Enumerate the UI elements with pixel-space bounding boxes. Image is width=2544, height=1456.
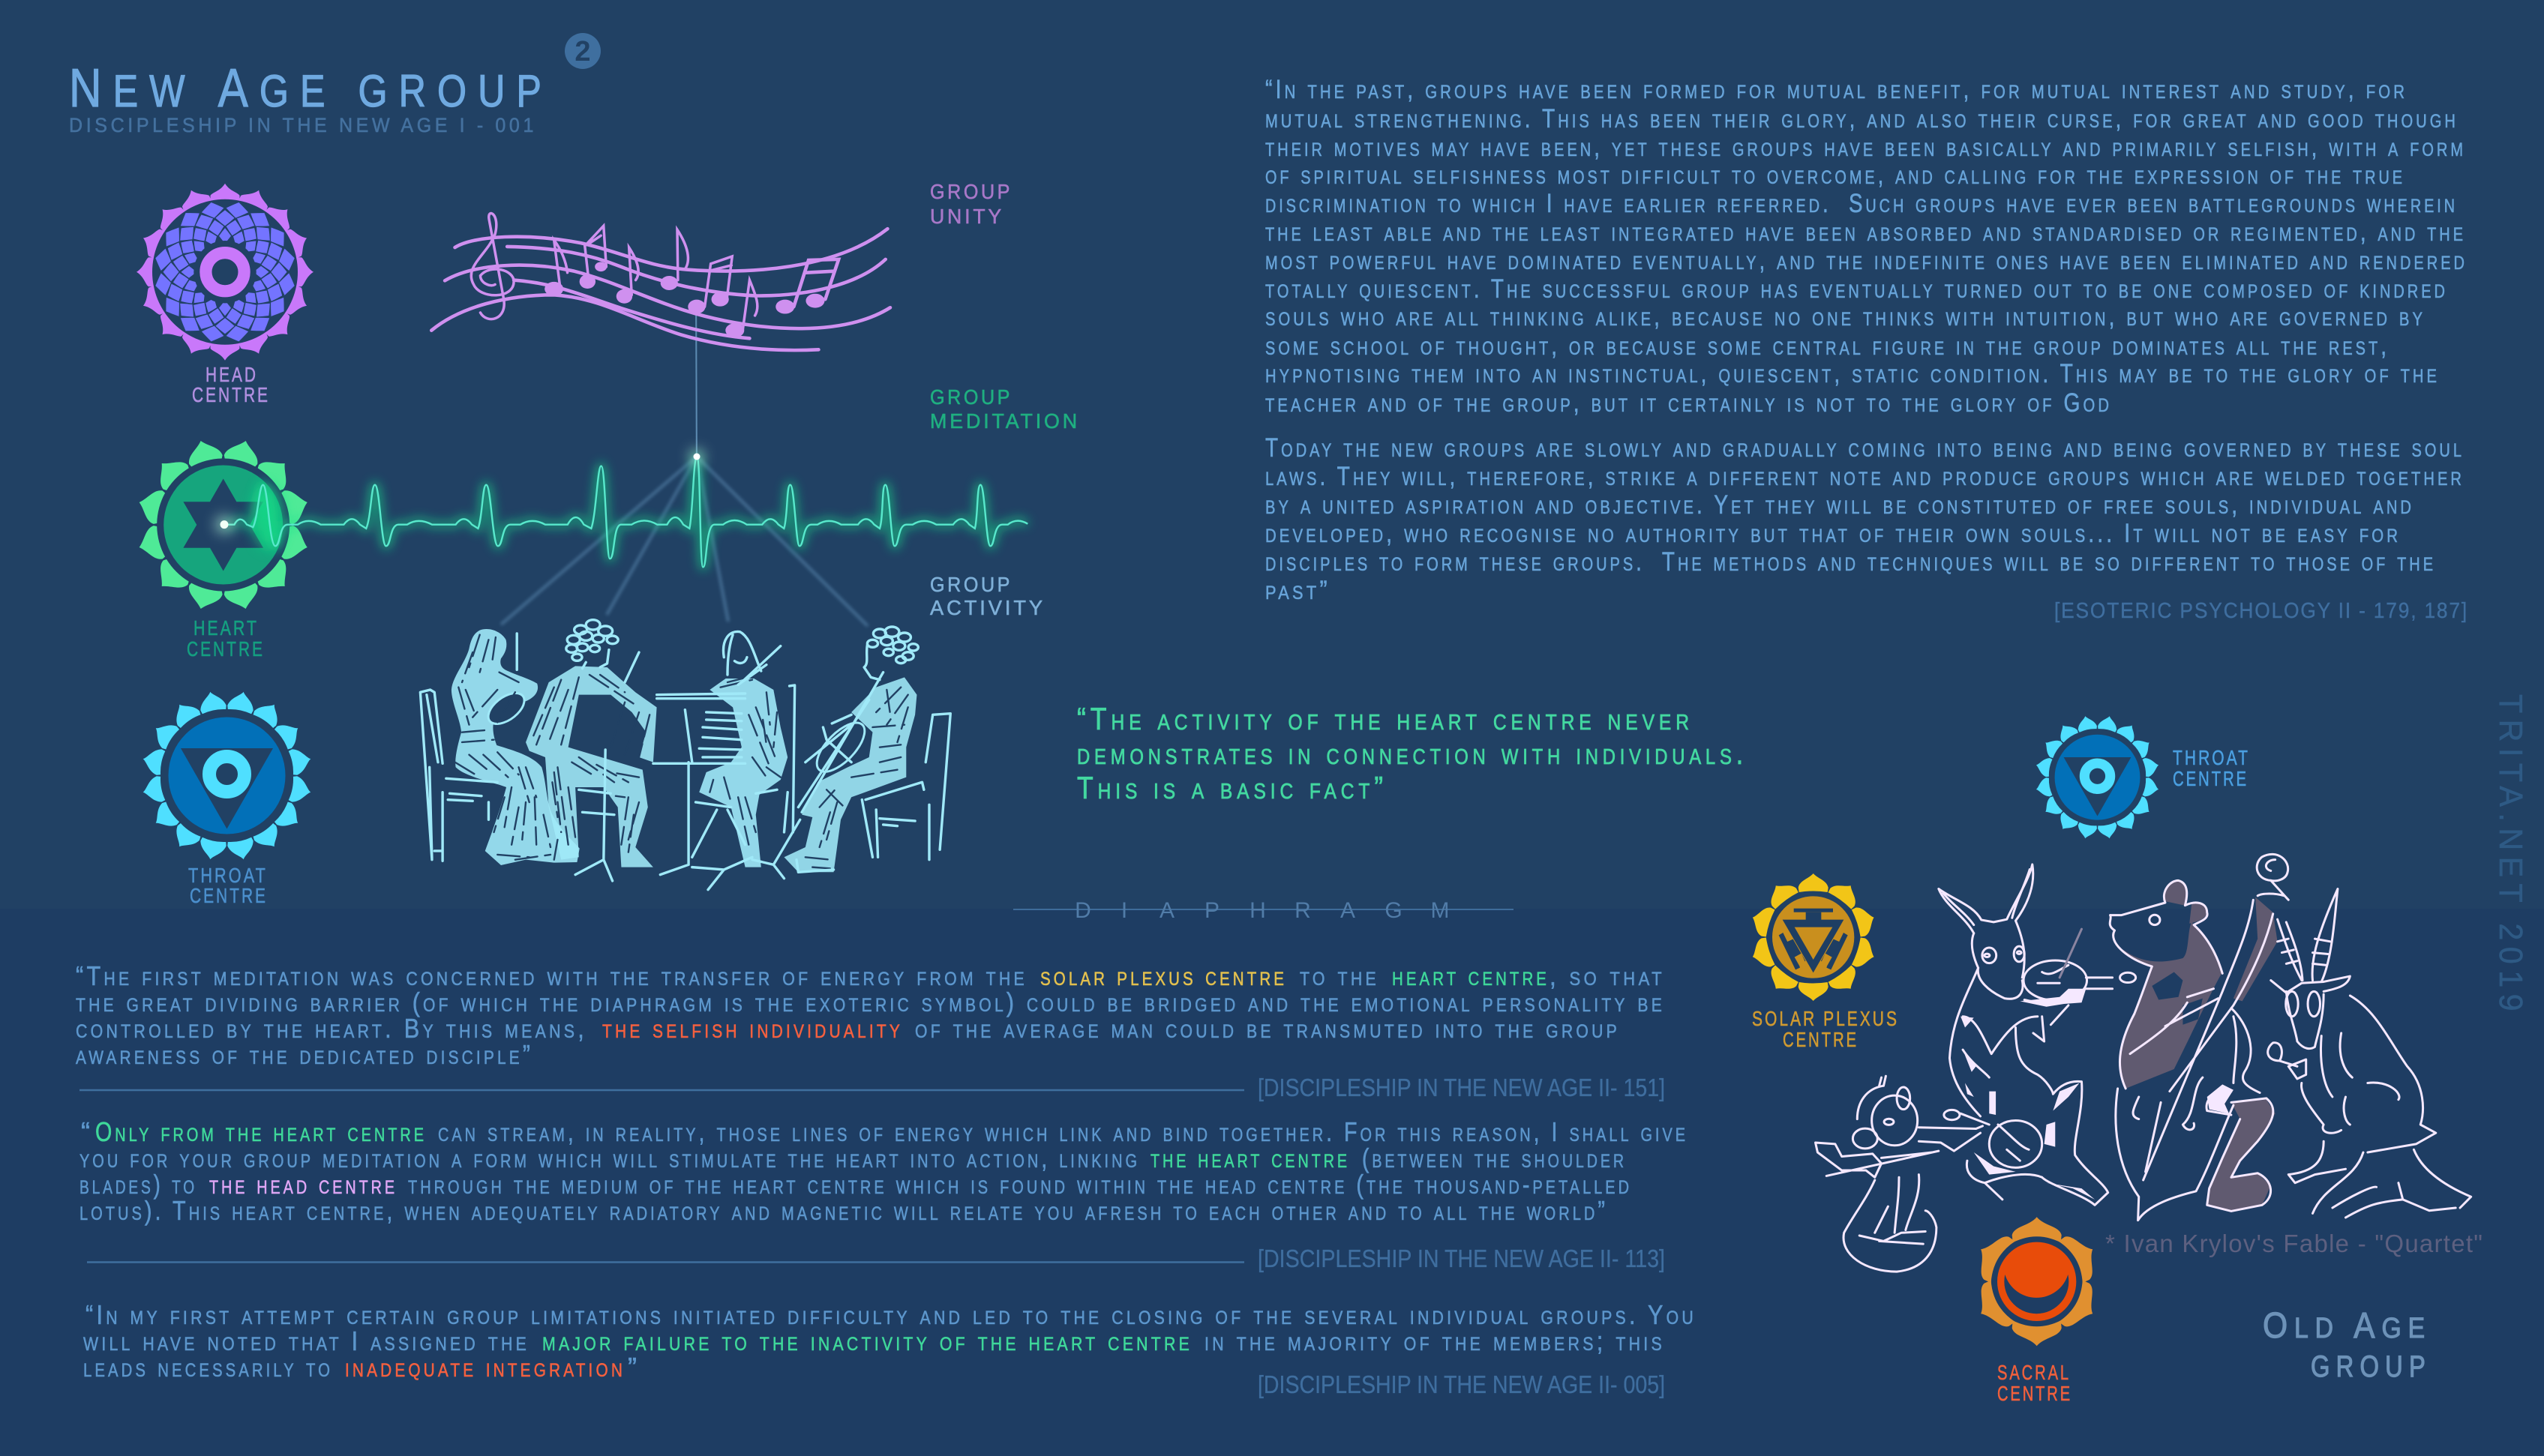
label: solar plexus centre: CENTRE: [1783, 1028, 1858, 1051]
label: throat centre small: [2173, 746, 2250, 790]
quote 1: “The first meditation was concerned with the transfer of energy from the: [76, 960, 1028, 991]
goat: [2278, 919, 2302, 981]
green heart centre quote: demonstrates in connection with individuals.: [1077, 735, 1748, 771]
quote 3: ”: [628, 1352, 640, 1383]
quote 1: awareness of the dedicated disciple”: [76, 1039, 533, 1070]
main quotation: right panel: [1265, 75, 2468, 623]
quote 1: controlled by the heart. By this means,: [76, 1013, 587, 1044]
label: group unity: UNITY: [930, 205, 1004, 228]
green heart centre quote: This is a basic fact”: [1077, 770, 1388, 805]
label: throat centre: THROAT: [188, 864, 268, 887]
hare: [1939, 864, 2033, 978]
quote 3: [83, 1299, 1696, 1383]
bear lines: [2110, 880, 2222, 973]
quote 1: [76, 960, 1665, 1070]
paragraph 1: [1265, 75, 2468, 418]
quote 2: the heart centre: [1150, 1143, 1350, 1173]
quartet animals illustration: [1816, 854, 2471, 1272]
diaphragm divider: G: [1384, 898, 1402, 923]
number badge: 2: [574, 36, 591, 67]
quote 1: of the average man could be transmuted into the group: [915, 1013, 1620, 1044]
label: heart centre: [187, 616, 265, 661]
diaphragm divider: H: [1250, 898, 1266, 923]
label: head centre: HEAD: [206, 363, 258, 386]
label: head centre: [192, 363, 270, 406]
string quartet illustration: [420, 620, 950, 890]
label: group activity: ACTIVITY: [930, 596, 1046, 619]
quote 3: major failure to the inactivity of the heart centre: [542, 1326, 1192, 1356]
third player head and bow: [692, 631, 795, 857]
quote 2: [80, 1116, 1688, 1226]
label: group activity: GROUP: [930, 573, 1012, 596]
music staff and notes: [431, 213, 890, 350]
source 1: [DISCIPLESHIP IN THE NEW AGE II- 151]: [1258, 1074, 1665, 1101]
quote 2: “: [81, 1116, 94, 1147]
number badge: [565, 33, 601, 69]
quote 2: (between the shoulder: [1362, 1143, 1627, 1173]
quote 3: leads necessarily to: [83, 1352, 333, 1383]
fourth player hair, face, cello: [873, 629, 886, 638]
label: throat centre small: THROAT: [2173, 746, 2250, 769]
quote 1: solar plexus centre: [1040, 960, 1287, 991]
label: group unity: [930, 180, 1012, 228]
label: group meditation: [930, 385, 1080, 433]
second player hair: [574, 625, 587, 634]
label: sacral centre: CENTRE: [1997, 1382, 2072, 1405]
label: head centre: CENTRE: [192, 383, 270, 406]
quote 2: blades) to: [80, 1169, 197, 1200]
bear dark patches: [2152, 972, 2203, 1025]
quote 3: inadequate integration: [345, 1352, 626, 1383]
quote 3: will have noted that I assigned the: [83, 1326, 530, 1356]
diaphragm divider: A: [1160, 898, 1174, 923]
heartbeat line: [215, 449, 1028, 567]
quote 1: the selfish individuality: [602, 1013, 903, 1044]
watermark: TRITA.NET 2019: [2492, 694, 2529, 1017]
green heart centre quote: “The activity of the heart centre never: [1077, 701, 1694, 736]
source 2: [DISCIPLESHIP IN THE NEW AGE II- 113]: [1258, 1245, 1665, 1272]
hatch: [455, 635, 908, 868]
label: group activity: [930, 573, 1046, 619]
quote 2: lotus). This heart centre, when adequately radiatory and magnetic will relate you afresh to each other and to all the world”: [80, 1195, 1608, 1226]
light beams: [501, 311, 868, 626]
source: [ESOTERIC PSYCHOLOGY II - 179, 187]: [2054, 599, 2468, 623]
quote 1: to the: [1300, 960, 1379, 991]
bear fill: [2120, 880, 2278, 1211]
diaphragm divider: A: [1340, 898, 1355, 923]
title: NEW AGE GROUP: [69, 58, 553, 118]
quote 2: you for your group meditation a form which will stimulate the heart into action, linking: [80, 1143, 1140, 1173]
diaphragm divider: R: [1294, 898, 1311, 923]
double bass: [2144, 900, 2273, 1180]
label: group meditation: MEDITATION: [930, 409, 1080, 433]
fable caption: * Ivan Krylov's Fable - "Quartet": [2105, 1230, 2482, 1257]
icon: solar plexus centre: [1748, 873, 1879, 1001]
monkey: [1857, 1076, 1886, 1119]
green heart centre quote: [1077, 701, 1748, 805]
quote 2: Only from the heart centre: [95, 1116, 427, 1147]
label: group meditation: GROUP: [930, 385, 1012, 409]
paragraph 2: [1265, 433, 2464, 605]
diaphragm divider: [1013, 898, 1514, 923]
label: group unity: GROUP: [930, 180, 1012, 203]
quote 1: , so that: [1550, 960, 1665, 991]
label: sacral centre: SACRAL: [1997, 1361, 2071, 1384]
subtitle: DISCIPLESHIP IN THE NEW AGE I - 001: [69, 114, 537, 136]
diaphragm divider: P: [1204, 898, 1220, 923]
quote 1: the great dividing barrier (of which the diaphragm is the exoteric symbol) could be bridged and the emotional personality be: [76, 987, 1665, 1017]
violin and gaps: [481, 689, 874, 777]
label: solar plexus centre: SOLAR PLEXUS: [1752, 1007, 1899, 1030]
paragraph 2: past”: [1265, 576, 1330, 605]
quote 3: “In my first attempt certain group limitations initiated difficulty and led to the closing of the several individual groups. You: [86, 1299, 1696, 1330]
icon: heart centre: [135, 436, 312, 613]
icon: head centre: [136, 184, 314, 361]
icon: throat centre small: [2034, 715, 2161, 840]
quote 1: heart centre: [1392, 960, 1550, 991]
paragraph 1: teacher and of the group, but it certainly is not to the glory of God: [1265, 388, 2112, 418]
label: throat centre: [188, 864, 268, 907]
old age group title: OLD AGE: [2263, 1306, 2432, 1346]
label: sacral centre: [1997, 1361, 2072, 1405]
quote 2: can stream, in reality, those lines of energy which link and bind together. For this reason, I shall give: [438, 1116, 1688, 1147]
figure bodies: [452, 629, 916, 872]
quote 2: through the medium of the heart centre which is found within the head centre (the thousand-petalled: [408, 1169, 1632, 1200]
old age group title: [2263, 1306, 2432, 1383]
label: throat centre small: CENTRE: [2173, 767, 2248, 790]
source 3: [DISCIPLESHIP IN THE NEW AGE II- 005]: [1258, 1371, 1665, 1398]
label: throat centre: CENTRE: [190, 884, 268, 907]
diaphragm divider: I: [1121, 898, 1127, 923]
diaphragm divider: D: [1075, 898, 1091, 923]
quote 3: in the majority of the members; this: [1204, 1326, 1665, 1356]
diaphragm divider: M: [1431, 898, 1449, 923]
label: heart centre: CENTRE: [187, 637, 265, 661]
icon: throat centre: [140, 689, 314, 862]
quote 2: the head centre: [209, 1169, 398, 1200]
outlines: [420, 620, 950, 890]
label: solar plexus centre: [1752, 1007, 1899, 1051]
white blotches: [1960, 989, 2234, 1200]
icon: sacral centre: [1969, 1217, 2105, 1346]
label: heart centre: HEART: [194, 616, 259, 640]
old age group title: GROUP: [2311, 1350, 2432, 1383]
